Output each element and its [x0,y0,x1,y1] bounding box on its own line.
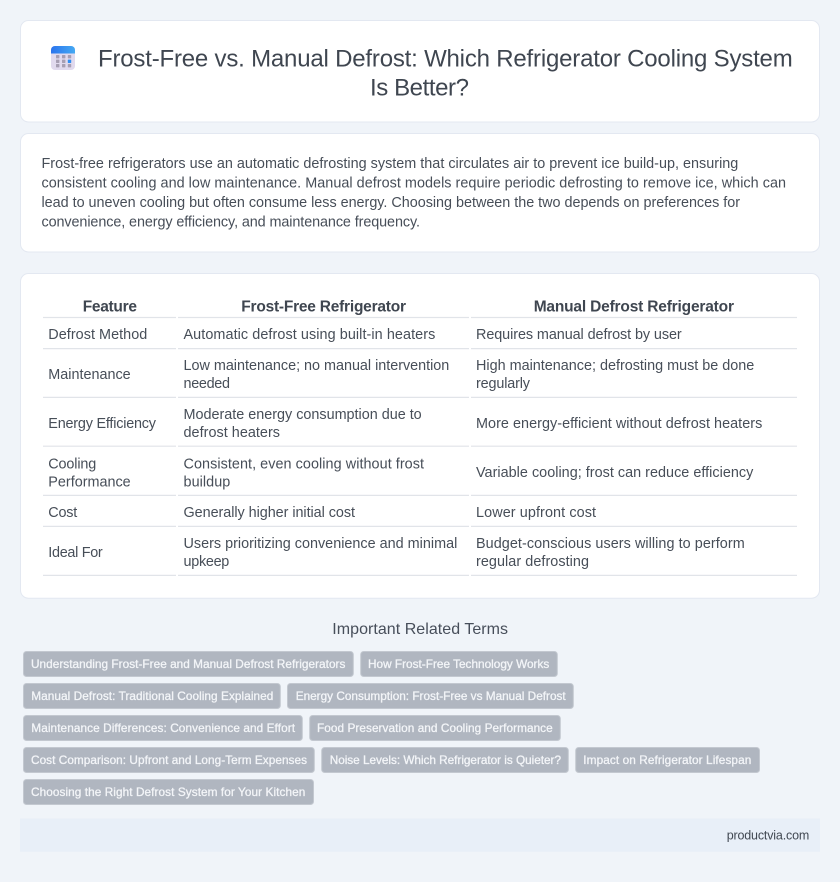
row: cost [48,505,596,521]
row: ideal for: Ideal For [48,545,103,561]
chip row 4: Noise Levels: Which Refrigerator is Quieter? [330,753,561,767]
table header: Feature [83,299,137,316]
row: cooling performance: Variable cooling; frost can reduce efficiency [476,465,754,481]
text block: summary: lead to uneven cooling but often consume less energy. Choosing between the two depends on preferences for [42,195,740,211]
row: maintenance [48,358,754,392]
panel: comparison table [20,274,820,598]
row: maintenance: regularly [476,376,531,392]
chip row 3 [24,716,560,740]
chip row 1: Understanding Frost-Free and Manual Defrost Refrigerators [31,657,345,671]
row: ideal for: Budget-conscious users willing to perform [476,536,745,552]
row: maintenance: High maintenance; defrosting must be done [476,358,754,374]
row: cost: Generally higher initial cost [184,505,355,521]
table header: Manual Defrost Refrigerator [534,299,734,316]
row: energy efficiency: More energy-efficient without defrost heaters [476,416,762,432]
row: cooling performance: Performance [48,474,131,490]
row: maintenance: needed [184,376,230,392]
row: defrost method: Requires manual defrost by user [476,327,682,343]
row: energy efficiency: Energy Efficiency [48,416,157,432]
title: Is Better? [370,75,469,102]
chip row 2: Manual Defrost: Traditional Cooling Explained [31,689,273,703]
chip row 3: Food Preservation and Cooling Performance [317,721,553,735]
heading: related terms: Important Related Terms [332,621,508,638]
row: energy efficiency [48,407,762,441]
row: ideal for: Users prioritizing convenience and minimal [184,536,457,552]
row: maintenance: Low maintenance; no manual intervention [184,358,449,374]
text block: summary: convenience, energy efficiency, and maintenance frequency. [42,214,420,230]
row: energy efficiency: Moderate energy consumption due to [184,407,422,423]
chip row 1: How Frost-Free Technology Works [368,657,549,671]
row: cooling performance [48,456,754,490]
row: energy efficiency: defrost heaters [184,425,280,441]
chip row 4: Cost Comparison: Upfront and Long-Term Expenses [31,753,307,767]
title [98,46,793,102]
row: defrost method: Defrost Method [48,327,147,343]
text block: summary: Frost-free refrigerators use an automatic defrosting system that circulates air to prevent ice build-up, ensuring [42,156,738,172]
chip row 2: Energy Consumption: Frost-Free vs Manual Defrost [296,689,566,703]
panel: related term chips [24,652,760,804]
row: defrost method [48,327,682,343]
chip row 1 [24,652,557,676]
text block: summary [42,156,786,230]
title: Frost-Free vs. Manual Defrost: Which Refrigerator Cooling System [98,46,793,73]
chip row 4: Impact on Refrigerator Lifespan [583,753,751,767]
icon: calendar grid [51,46,75,70]
row: cooling performance: buildup [184,474,230,490]
row: maintenance: Maintenance [48,367,131,383]
row: cooling performance: Consistent, even cooling without frost [184,456,424,472]
chip row 4 [24,748,760,772]
chip row 2 [24,684,573,708]
row: defrost method: Automatic defrost using built-in heaters [184,327,435,343]
row: cost: Cost [48,505,77,521]
table header: Frost-Free Refrigerator [241,299,406,316]
table header [83,299,734,316]
chip row 5: Choosing the Right Defrost System for Your Kitchen [31,785,305,799]
panel: footer [20,818,820,852]
row: cost: Lower upfront cost [476,505,596,521]
chip row 5 [24,780,314,804]
footer source: productvia.com [727,828,809,842]
text block: summary: consistent cooling and low maintenance. Manual defrost models require periodic defrosting to remove ice, which can [42,176,786,192]
row: ideal for [48,536,745,570]
panel: title card [20,20,820,122]
panel: intro paragraph [20,134,820,252]
chip row 3: Maintenance Differences: Convenience and Effort [31,721,296,735]
row: cooling performance: Cooling [48,456,96,472]
row: ideal for: upkeep [184,554,229,570]
row: ideal for: regular defrosting [476,554,589,570]
